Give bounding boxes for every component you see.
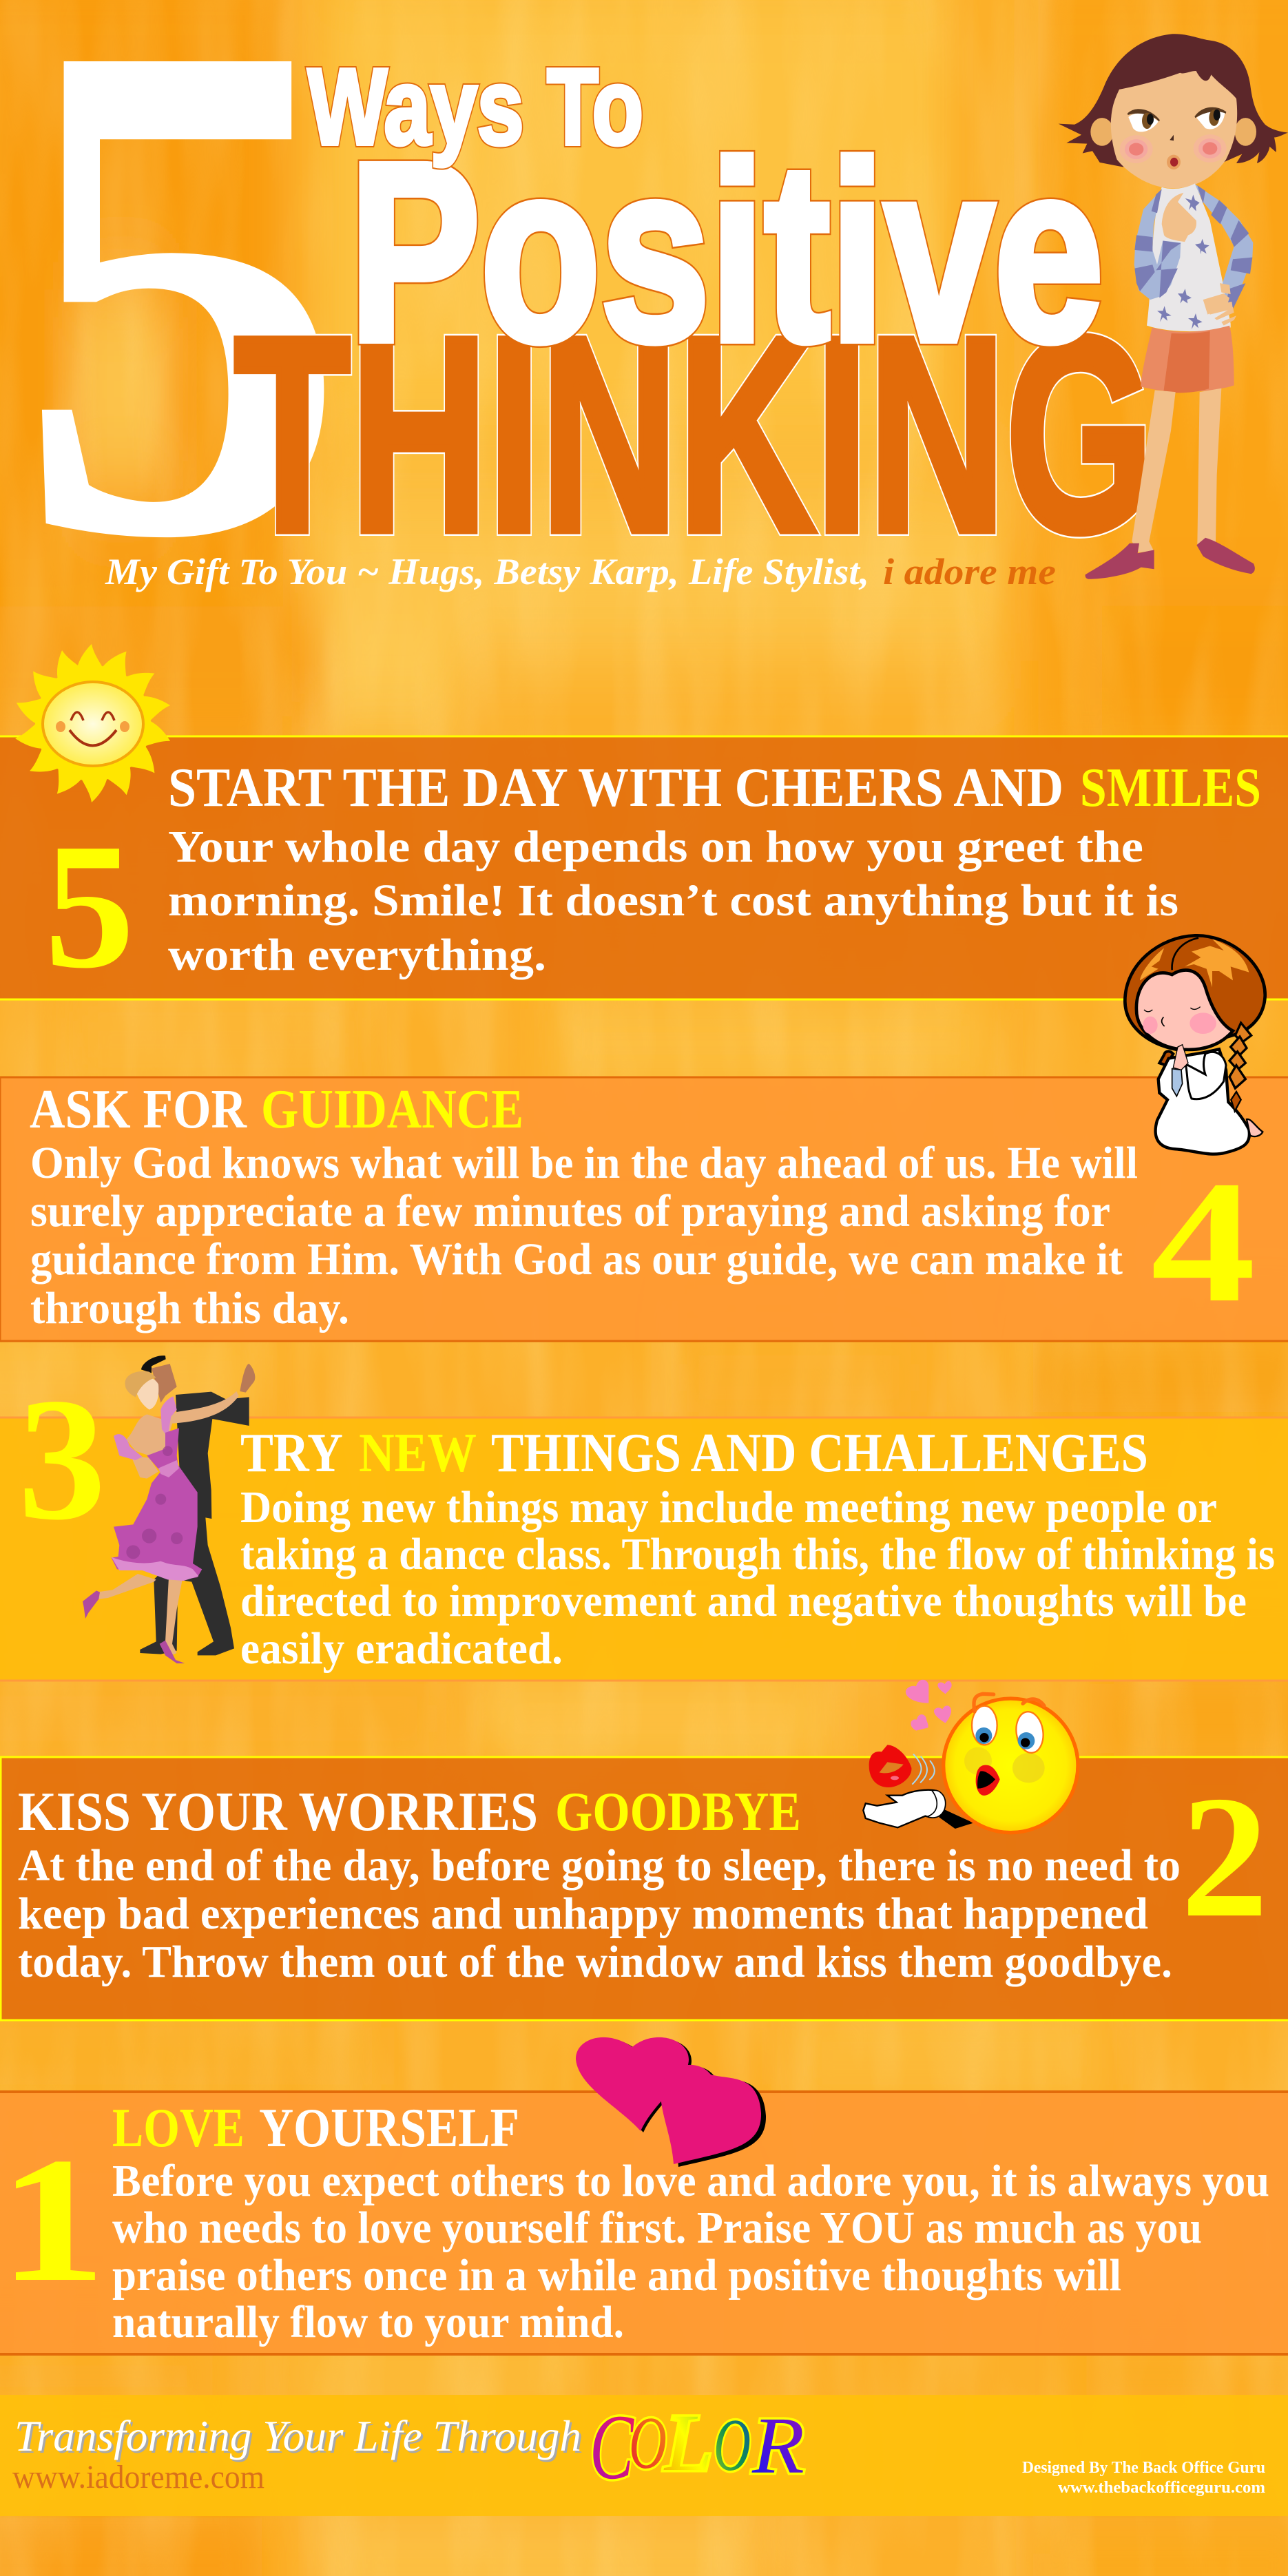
tagline: Transforming Your Life Through [14, 2411, 581, 2460]
panel: 2 kiss your worries [1, 1680, 1288, 2020]
COLOR rainbow word: L [663, 2398, 713, 2488]
website link: www.iadoreme.com [12, 2459, 264, 2495]
body text: Only God knows what will be in the day ahead of us. He will [30, 1138, 1138, 1188]
body text [18, 1840, 1181, 1987]
heading [112, 2098, 519, 2159]
body text: naturally flow to your mind. [112, 2297, 624, 2347]
heading: LOVE [112, 2098, 245, 2159]
body text: easily eradicated. [240, 1623, 563, 1674]
subtitle credit line: i adore me [883, 551, 1056, 592]
body text [240, 1482, 1275, 1674]
body text: praise others once in a while and positive thoughts will [112, 2250, 1121, 2300]
heading: TRY [240, 1423, 343, 1484]
body text: Your whole day depends on how you greet the [168, 822, 1143, 872]
designer credit [1022, 2459, 1265, 2497]
icon: two pink hearts [576, 2037, 766, 2167]
title: Ways To: Ways To [308, 47, 643, 167]
designer credit: Designed By The Back Office Guru [1022, 2459, 1265, 2477]
body text: through this day. [30, 1283, 349, 1333]
body text: directed to improvement and negative thoughts will be [240, 1576, 1247, 1626]
body text [30, 1138, 1138, 1333]
COLOR rainbow word: R [751, 2400, 804, 2491]
heading: KISS YOUR WORRIES [18, 1782, 538, 1842]
footer band [0, 2395, 1288, 2516]
body text: morning. Smile! It doesn’t cost anything but it is [168, 875, 1178, 926]
heading: YOURSELF [259, 2098, 519, 2159]
heading: ASK FOR [30, 1079, 247, 1140]
body text: keep bad experiences and unhappy moments that happened [18, 1889, 1148, 1939]
heading: NEW [359, 1423, 477, 1484]
COLOR rainbow word: C [590, 2396, 634, 2499]
icon: blowing-kiss smiley [863, 1680, 1078, 1833]
COLOR rainbow word: O [714, 2404, 751, 2486]
icon: smiling sun [12, 643, 174, 803]
illustration: thinking girl [1059, 34, 1288, 579]
heading: START THE DAY WITH CHEERS AND [168, 758, 1063, 818]
number 3: 3 [18, 1362, 106, 1557]
COLOR rainbow word [590, 2396, 804, 2499]
subtitle credit line: My Gift To You ~ Hugs, Betsy Karp, Life Stylist, [105, 551, 869, 592]
heading: GUIDANCE [261, 1079, 523, 1140]
number 4: 4 [1151, 1145, 1256, 1338]
body text: worth everything. [168, 930, 546, 980]
heading: THINGS AND CHALLENGES [491, 1423, 1148, 1484]
body text: Doing new things may include meeting new people or [240, 1482, 1217, 1533]
number 5: 5 [45, 807, 134, 1006]
heading: GOODBYE [555, 1782, 801, 1842]
COLOR rainbow word: O [629, 2402, 667, 2484]
title: Ways To: Ways To [308, 47, 643, 167]
designer credit: www.thebackofficeguru.com [1058, 2479, 1265, 2497]
body text [112, 2156, 1269, 2347]
tagline: Transforming Your Life Through [17, 2413, 583, 2462]
panel: 5 start the day [0, 643, 1288, 1006]
panel: 4 ask for guidance [0, 935, 1288, 1341]
number 1: 1 [0, 2121, 106, 2319]
body text: At the end of the day, before going to sleep, there is no need to [18, 1840, 1181, 1891]
panel: 3 try new things [0, 1355, 1288, 1681]
icon: praying girl [1125, 935, 1265, 1154]
heading: SMILES [1080, 758, 1261, 818]
panel: 1 love yourself [0, 2037, 1288, 2354]
heading [30, 1079, 523, 1140]
number 2: 2 [1181, 1760, 1269, 1953]
body text: who needs to love yourself first. Praise YOU as much as you [112, 2203, 1202, 2253]
illustration: dancing couple [83, 1355, 255, 1663]
body text: today. Throw them out of the window and kiss them goodbye. [18, 1937, 1172, 1987]
body text: guidance from Him. With God as our guide, we can make it [30, 1234, 1123, 1285]
body text [168, 822, 1178, 980]
heading [240, 1423, 1148, 1484]
body text: surely appreciate a few minutes of praying and asking for [30, 1186, 1110, 1236]
